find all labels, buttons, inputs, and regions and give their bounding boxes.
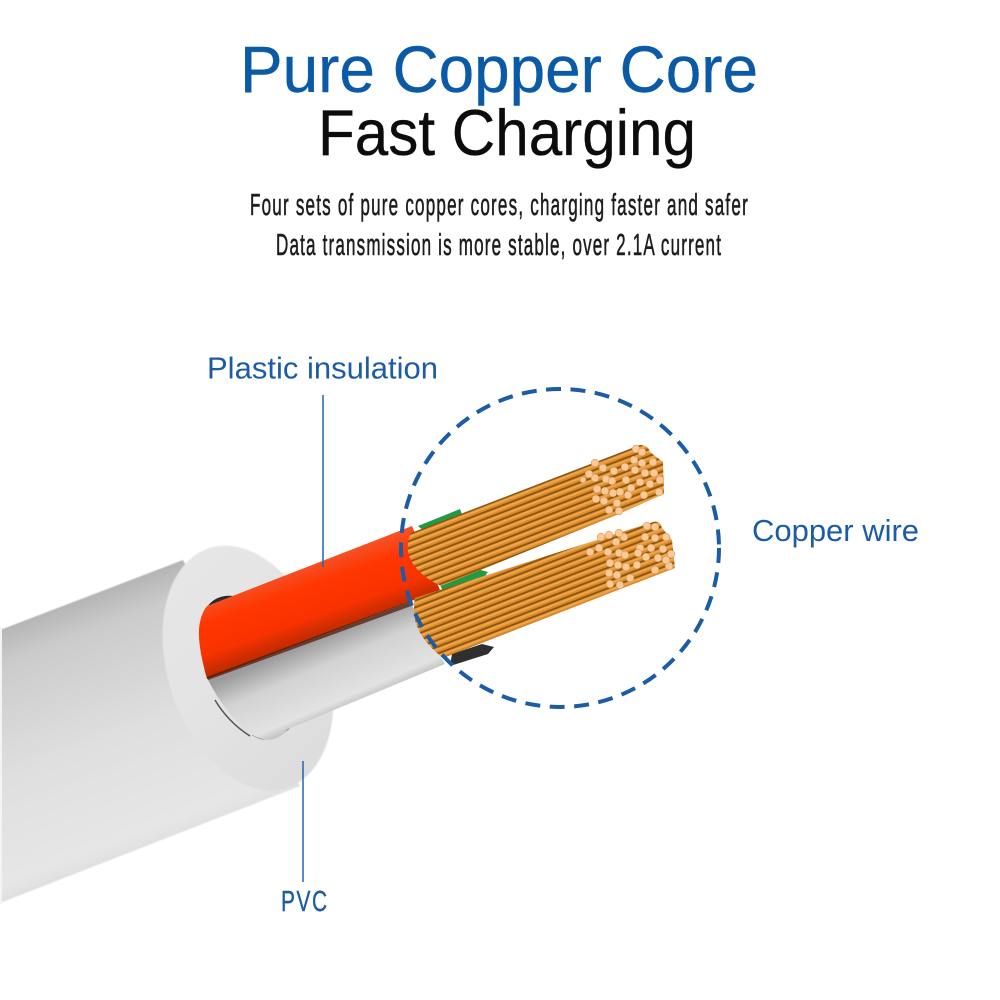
leader line: plastic insulation bbox=[322, 395, 324, 567]
upper strands bbox=[408, 445, 664, 586]
black inner wire top bbox=[207, 596, 234, 607]
jacket left edge highlight bbox=[0, 628, 2, 904]
green inner wire bbox=[418, 509, 488, 595]
lower strands bbox=[414, 522, 675, 658]
description text bbox=[250, 188, 748, 262]
label: copper wire: Copper wire bbox=[752, 513, 919, 548]
label: PVC: PVC bbox=[281, 886, 327, 918]
label: plastic insulation: Plastic insulation bbox=[207, 350, 438, 386]
dark seam between wires bbox=[207, 601, 414, 680]
jacket end ring bbox=[133, 523, 363, 813]
outer PVC jacket bbox=[0, 560, 300, 903]
description line 1: Four sets of pure copper cores, charging faster and safer bbox=[250, 188, 748, 222]
cable illustration bbox=[0, 445, 675, 904]
upper strand ends bbox=[580, 445, 664, 515]
copper core upper bbox=[408, 445, 664, 586]
red insulated wire bbox=[199, 526, 440, 679]
copper core lower bbox=[414, 522, 675, 658]
dashed magnifier circle bbox=[401, 389, 719, 707]
description line 2: Data transmission is more stable, over 2.1A current bbox=[276, 228, 721, 262]
leader line: PVC bbox=[302, 761, 304, 882]
lower strand ends bbox=[586, 522, 675, 589]
hole shadow lower left bbox=[215, 700, 250, 736]
white insulated wire bbox=[207, 602, 445, 740]
title bbox=[240, 32, 758, 169]
title line: Pure Copper Core: Pure Copper Core bbox=[240, 32, 758, 106]
black inner wire bottom bbox=[252, 725, 290, 740]
title line: Fast Charging: Fast Charging bbox=[318, 96, 696, 169]
black inner wire end bbox=[450, 644, 494, 666]
